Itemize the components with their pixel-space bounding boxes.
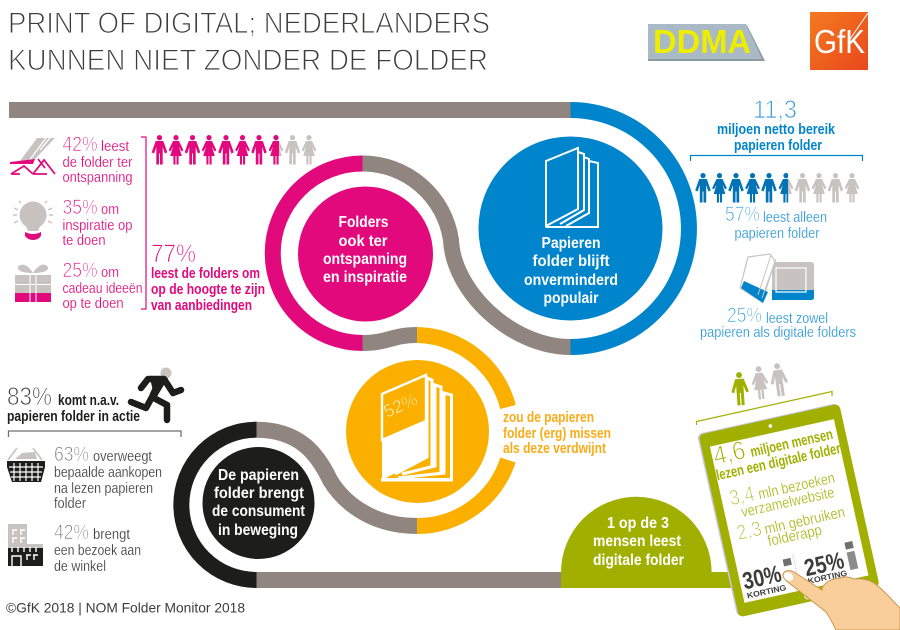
text: 57% alleen papier: papieren folder — [734, 225, 820, 242]
title: PRINT OF DIGITAL; NEDERLANDERS — [8, 7, 490, 40]
text: 35% inspiratie: inspiratie op — [62, 217, 132, 234]
text: 42% ontspanning: 42% — [62, 133, 98, 156]
text: 25% beide: leest zowel — [766, 310, 828, 327]
text: 83% actie: 83% — [7, 383, 52, 411]
icon: light bulb — [13, 201, 53, 240]
icon: folder and tablet — [740, 254, 814, 303]
text: 57% alleen papier — [725, 203, 827, 242]
text: 42% winkel — [54, 521, 141, 575]
text: 63% aankopen: overweegt — [93, 448, 153, 465]
panel: black circle: De papieren — [218, 467, 299, 484]
text: 35% inspiratie: te doen — [62, 232, 106, 249]
text: 77% aanbiedingen — [151, 240, 265, 314]
logo: GfK — [810, 12, 868, 70]
text: 11,3 miljoen bereik: papieren folder — [734, 137, 822, 154]
panel: pink circle — [298, 186, 433, 322]
text: 63% aankopen: bepaalde aankopen — [54, 464, 162, 481]
text: 2,3 mln: 2,3 — [734, 517, 764, 545]
title — [8, 7, 490, 77]
panel: pink circle: en inspiratie — [323, 269, 407, 286]
text: 2,3 mln: mln gebruiken — [763, 504, 847, 538]
pink ring — [273, 164, 362, 343]
icon: runner — [131, 368, 181, 420]
panel: pink circle: ook ter — [338, 233, 388, 250]
panel: green dome: digitale folder — [593, 552, 684, 569]
text: 3,4 mln: 3,4 — [727, 482, 757, 510]
icon: shop building — [8, 524, 43, 566]
text: 63% aankopen: folder — [54, 495, 86, 512]
text: yellow caption: als deze verdwijnt — [503, 440, 606, 457]
text: 63% aankopen: 63% — [54, 443, 89, 466]
tablet — [697, 403, 880, 618]
text: 83% actie: komt n.a.v. — [58, 392, 119, 409]
text: 11,3 miljoen bereik: miljoen netto bereik — [717, 121, 836, 138]
text: 35% inspiratie: om — [101, 201, 119, 218]
panel: blue circle — [478, 136, 662, 320]
text: 42% winkel: een bezoek aan — [54, 542, 141, 559]
text: 57% alleen papier: leest alleen — [763, 209, 827, 226]
text: 2,3 mln: folderapp — [766, 522, 823, 550]
icon: gift — [15, 265, 51, 302]
panel: green dome: mensen leest — [593, 533, 682, 550]
text: 11,3 miljoen bereik: 11,3 — [753, 96, 797, 124]
text: 42% winkel: brengt — [93, 526, 131, 543]
text: 3,4 mln — [727, 465, 839, 523]
coupon: 25%: 25% — [802, 547, 847, 582]
panel: pink circle: Folders — [338, 214, 389, 231]
text: 57% alleen papier: 57% — [725, 203, 760, 226]
text: 3,4 mln: verzamelwebsite — [740, 484, 836, 521]
text: 25% cadeau — [62, 259, 142, 312]
text: 42% ontspanning: de folder ter — [62, 154, 133, 171]
text: 77% aanbiedingen: van aanbiedingen — [151, 297, 252, 314]
text: 25% cadeau: op te doen — [62, 295, 124, 312]
text: yellow caption — [503, 409, 611, 457]
icon: folder with 52% — [380, 375, 453, 482]
text: 4,6 miljoen: lezen een digitale folder — [715, 440, 842, 484]
text: 25% cadeau: cadeau ideeën — [62, 280, 142, 297]
logo: GfK: GfK — [814, 23, 865, 60]
coupon: 25%: KORTING — [807, 569, 848, 586]
text: yellow caption: folder (erg) missen — [503, 425, 611, 442]
text: 83% actie: papieren folder in actie — [7, 408, 140, 425]
coupon: 30%: KORTING — [746, 583, 787, 600]
blue ring — [570, 110, 689, 347]
text: 77% aanbiedingen: leest de folders om — [151, 265, 260, 282]
panel: pink circle: ontspanning — [323, 251, 407, 268]
text: 25% beide — [700, 304, 856, 341]
pictogram: 8 of 10 people pink — [152, 135, 316, 164]
coupon: 30%: 30% — [740, 561, 784, 595]
panel: green dome — [561, 497, 735, 588]
black ring — [181, 430, 256, 580]
icon: shopping basket — [7, 448, 45, 482]
panel: black circle — [202, 447, 314, 559]
icon: hand — [782, 570, 900, 630]
text: 63% aankopen: na lezen papieren — [54, 480, 153, 497]
panel: blue circle: folder blijft — [532, 253, 610, 270]
panel: green dome: 1 op de 3 — [607, 515, 669, 532]
text: 3,4 mln: mln bezoeken — [757, 470, 836, 503]
text: 25% beide: 25% — [727, 304, 762, 327]
text: 42% ontspanning — [62, 133, 133, 186]
text: 77% aanbiedingen: 77% — [151, 240, 196, 268]
title: KUNNEN NIET ZONDER DE FOLDER — [8, 44, 488, 77]
coupon: 30% — [739, 554, 800, 601]
text: 2,3 mln — [734, 499, 849, 556]
pictogram: 6 of 10 people blue — [695, 173, 859, 202]
flow line: grey top bar and S-curves — [9, 110, 571, 580]
panel: blue circle: populair — [544, 290, 598, 307]
text: 4,6 miljoen — [709, 414, 842, 484]
text: 35% inspiratie — [62, 196, 132, 249]
text: source: ©GfK 2018 | NOM Folder Monitor 2018 — [6, 600, 245, 616]
panel: black circle: in beweging — [218, 522, 298, 539]
panel: black circle: de consument — [212, 503, 306, 520]
yellow ring — [417, 335, 508, 526]
text: 42% ontspanning: ontspanning — [62, 169, 132, 186]
text: 77% aanbiedingen: op de hoogte te zijn — [151, 281, 265, 298]
logo: DDMA: DDMA — [653, 23, 751, 60]
panel: blue circle: Papieren — [542, 235, 600, 252]
panel: blue circle: onverminderd — [524, 272, 618, 289]
text: 25% cadeau: om — [101, 264, 119, 281]
text: 11,3 miljoen bereik — [717, 96, 836, 154]
text: 42% winkel: de winkel — [54, 558, 106, 575]
text: 35% inspiratie: 35% — [62, 196, 98, 219]
text: 83% actie — [7, 383, 140, 425]
text: 4,6 miljoen: 4,6 — [710, 434, 748, 471]
icon: deck chair — [10, 138, 55, 174]
text: 25% cadeau: 25% — [62, 259, 98, 282]
text: yellow caption: zou de papieren — [503, 409, 594, 426]
text: 4,6 miljoen: miljoen mensen — [749, 426, 834, 461]
icon: folder with 52%: 52% — [380, 389, 421, 422]
icon: open folder — [546, 148, 598, 227]
text: 42% ontspanning: leest — [101, 138, 130, 155]
pictogram: 1 of 3 people green — [730, 362, 790, 406]
text: 42% winkel: 42% — [54, 521, 89, 544]
text: 63% aankopen — [54, 443, 162, 512]
panel: black circle: folder brengt — [214, 485, 305, 502]
panel: yellow circle — [346, 360, 489, 503]
text: 25% beide: papieren als digitale folders — [700, 324, 856, 341]
